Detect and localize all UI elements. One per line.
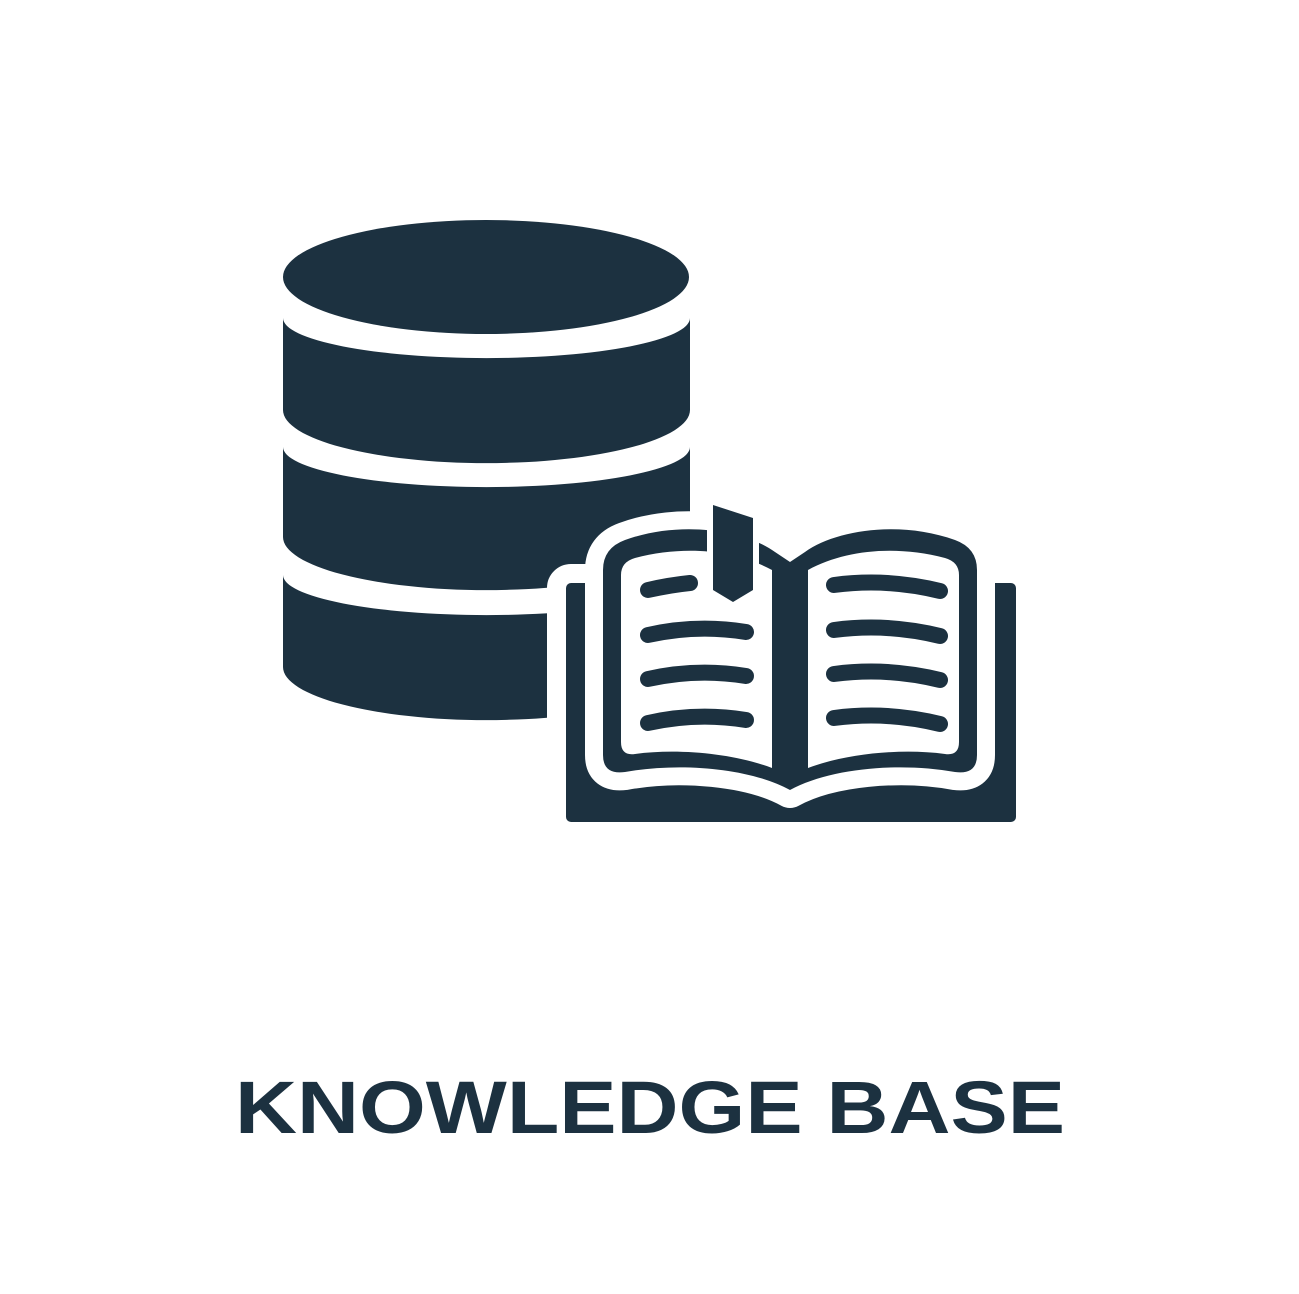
text lines [648, 583, 940, 724]
right page [808, 551, 959, 768]
book pages outline [603, 529, 977, 790]
left page [621, 551, 772, 768]
book cover [566, 583, 1016, 822]
icon: database cylinder [283, 220, 690, 720]
bookmark [713, 505, 753, 602]
title: KNOWLEDGE BASE [235, 1066, 1065, 1149]
icon: open book [566, 505, 1016, 822]
